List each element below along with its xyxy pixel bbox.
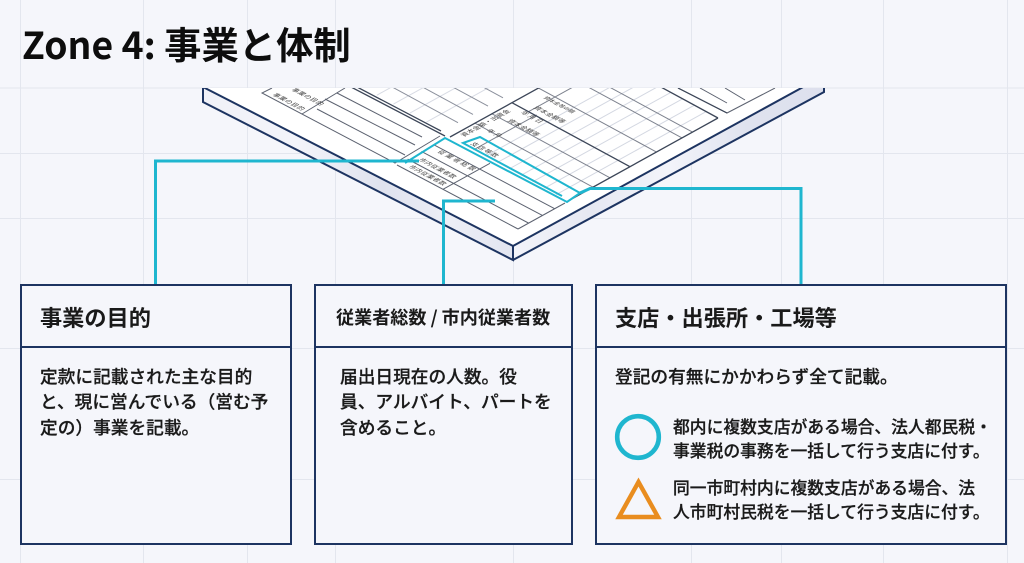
text: triangle note: 同一市町村内に複数支店がある場合、法 <box>673 474 975 498</box>
form field labels: 事業の目的 <box>270 91 309 112</box>
text: 従業者総数 body: 届出日現在の人数。役 <box>340 362 517 388</box>
panel: 事業の目的 <box>20 284 292 545</box>
sheet edges <box>203 86 824 260</box>
double rule <box>351 87 445 136</box>
form field labels: 資本金等の額 <box>541 95 578 115</box>
form field labels: 市内従業者数 <box>406 163 451 187</box>
text: 事業の目的 body: 定の）事業を記載。 <box>40 414 199 440</box>
far right form block <box>678 88 775 113</box>
sheet left side <box>247 111 512 258</box>
connector: 従業者数 <box>444 201 495 284</box>
form field labels: 事業の目的 <box>289 86 328 107</box>
text: circle note <box>673 414 992 462</box>
form field labels: 年 月 日 <box>518 109 547 124</box>
form field labels: 市内従業者数 <box>416 156 461 180</box>
form sheet illustration <box>202 88 825 262</box>
form field labels: 従業者総数 <box>435 148 482 173</box>
text: 支店 body: 登記の有無にかかわらず全て記載。 <box>615 362 898 388</box>
text: 事業の目的 body <box>40 362 268 440</box>
text: 従業者総数 body <box>340 362 552 440</box>
panel: 支店・出張所・工場等 <box>595 284 1007 545</box>
text: 事業の目的 body: と、現に営んでいる（営む予 <box>40 388 268 414</box>
upper middle grid <box>376 88 504 124</box>
left form block <box>262 88 440 163</box>
text: 従業者総数 body: 員、アルバイト、パートを <box>340 388 552 414</box>
icon: triangle <box>615 478 662 520</box>
text: 従業者総数 body: 含めること。 <box>340 414 446 440</box>
icon: circle <box>614 414 662 460</box>
heading: 支店・出張所・工場等: 支店・出張所・工場等 <box>615 300 837 332</box>
form field labels: 年 月 <box>484 127 506 139</box>
connector: 支店 <box>463 137 801 284</box>
heading: 従業者総数 / 市内従業者数: 従業者総数 / 市内従業者数 <box>336 304 550 330</box>
text: circle note: 事業税の事務を一括して行う支店に付す。 <box>673 438 990 462</box>
form field labels <box>270 86 578 187</box>
text: 事業の目的 body: 定款に記載された主な目的 <box>40 362 252 388</box>
text: circle note: 都内に複数支店がある場合、法人都民税・ <box>673 414 992 438</box>
text: triangle note <box>673 474 990 523</box>
sheet right side <box>550 88 823 238</box>
form field labels: 資本金額等 <box>505 117 544 138</box>
form field labels: 支店等数 <box>468 140 504 159</box>
connector: 事業の目的 <box>156 138 580 284</box>
main right grid <box>450 88 718 200</box>
title: Zone 4: 事業と体制 <box>22 16 351 70</box>
heading: 事業の目的: 事業の目的 <box>40 300 151 332</box>
panel: 従業者総数 <box>314 284 573 545</box>
form field labels: 資本金額・出資金 <box>457 107 513 138</box>
form field labels: 資本金額等 <box>531 104 570 125</box>
text: triangle note: 人市町村民税を一括して行う支店に付す。 <box>673 499 990 523</box>
sheet top surface <box>203 88 803 246</box>
lower form block <box>397 139 565 229</box>
